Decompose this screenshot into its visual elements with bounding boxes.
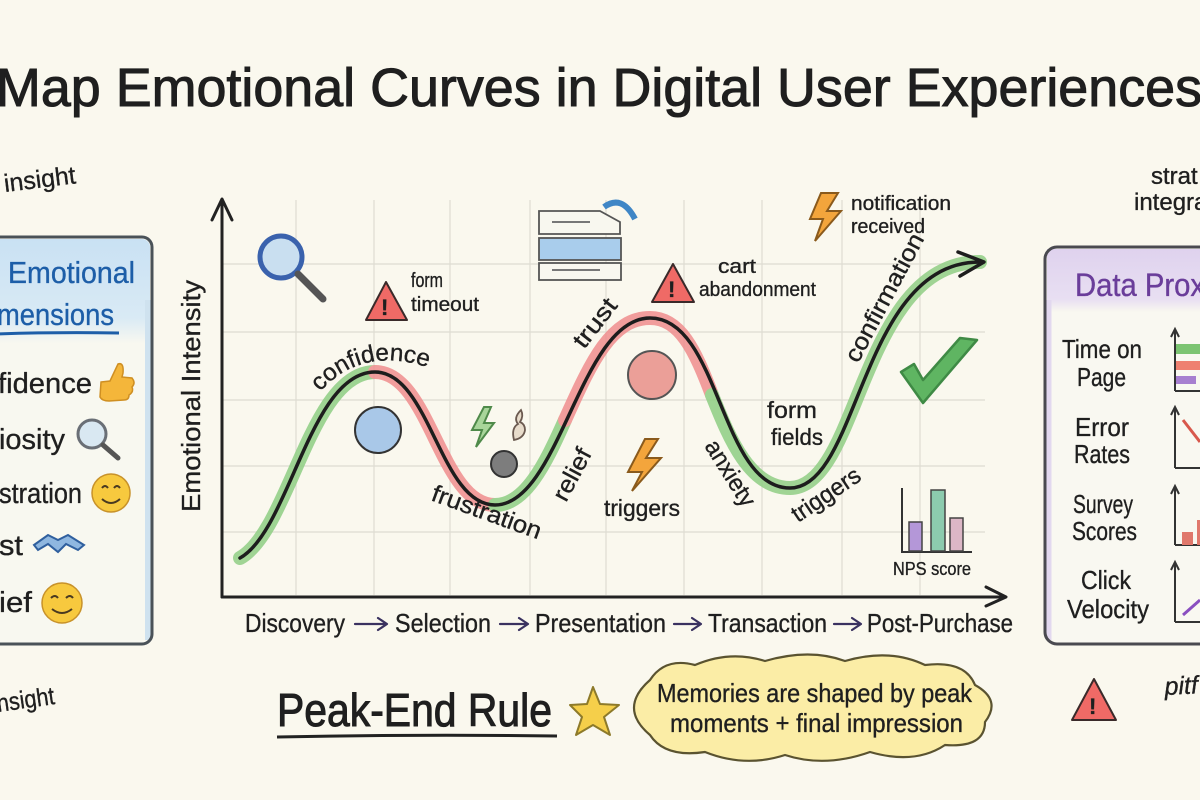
- note: pitfall: pitf: [1163, 671, 1200, 701]
- item: relief: [0, 583, 82, 623]
- x axis stages: Post-Purchase: [867, 608, 1013, 638]
- icon: check mark: [901, 338, 977, 403]
- chart: NPS score bars: [893, 488, 972, 579]
- item: curiosity: iosity: [0, 424, 65, 456]
- label: form fields: [767, 397, 823, 450]
- callout: notification received: [810, 193, 951, 241]
- x axis stages: [245, 608, 1013, 638]
- icon: warning triangle: [1072, 679, 1116, 720]
- curve line: [240, 262, 980, 558]
- curve color bands: [240, 262, 980, 558]
- proxy: error rates: Rates: [1074, 439, 1130, 469]
- x axis stages: Transaction: [708, 608, 827, 638]
- heading: peak-end rule: Peak-End Rule: [277, 684, 552, 736]
- callout: cart abandonment: !: [668, 277, 675, 302]
- curve labels: [265, 202, 968, 545]
- chart: NPS score bars: NPS score: [893, 559, 971, 579]
- curve labels: frustration: [428, 480, 545, 545]
- proxy: click velocity: Click: [1081, 565, 1132, 595]
- title: Map Emotional Curves in Digital User Experiences: [0, 58, 1200, 118]
- callout: triggers bolt: [604, 439, 680, 521]
- icon: magnifier: [260, 236, 323, 299]
- panel heading: mensions: [0, 297, 114, 332]
- x axis stages: Presentation: [535, 608, 666, 638]
- callout: cart abandonment: abandonment: [699, 279, 816, 301]
- curve labels: confidence: [314, 344, 429, 390]
- proxy: error rates: [1074, 407, 1200, 469]
- proxy: error rates: Error: [1075, 412, 1129, 442]
- curve labels: triggers: [786, 462, 866, 528]
- curve labels: confirmation: [839, 229, 930, 367]
- icon: bolt and smoke: [472, 407, 525, 447]
- icon: red circle: [628, 351, 676, 399]
- callout: memories cloud: Memories are shaped by peak: [657, 678, 973, 708]
- item: curiosity: [0, 420, 118, 458]
- icon: blue circle: [355, 407, 401, 453]
- y axis label: Emotional Intensity: [176, 280, 206, 512]
- icon: warning triangle: !: [1089, 694, 1096, 719]
- callout: form timeout: [366, 270, 479, 320]
- x axis stages: Discovery: [245, 608, 345, 638]
- callout: notification received: notification: [851, 193, 951, 215]
- item: confidence: [0, 364, 134, 401]
- axes: [212, 199, 1006, 606]
- label: form fields: form: [767, 397, 817, 423]
- callout: form timeout: timeout: [411, 294, 479, 316]
- callout: notification received: received: [851, 216, 925, 238]
- icon: star: [570, 687, 619, 735]
- curve labels: trust: [567, 293, 623, 354]
- callout: cart abandonment: [652, 256, 816, 302]
- icon: grey circle: [491, 451, 517, 477]
- curve labels: relief: [547, 443, 598, 506]
- callout: cart abandonment: cart: [718, 256, 757, 278]
- curve arrowhead: [958, 252, 984, 276]
- item: confidence: fidence: [0, 368, 92, 400]
- callout: form timeout: !: [381, 295, 388, 320]
- item: trust: [0, 530, 84, 562]
- curve labels: anxiety: [699, 435, 761, 512]
- proxy: time on page: Time on: [1062, 334, 1142, 364]
- item: hesitation: stration: [0, 478, 82, 510]
- panel: emotional dimensions: [0, 237, 152, 644]
- proxy: time on page: Page: [1077, 362, 1126, 392]
- x axis stages: Selection: [395, 608, 491, 638]
- callout: form timeout: form: [411, 270, 443, 292]
- panel heading: [0, 255, 135, 334]
- item: hesitation: [0, 474, 130, 512]
- callout: memories cloud: [634, 654, 992, 761]
- proxy: click velocity: [1067, 562, 1200, 624]
- proxy: click velocity: Velocity: [1067, 594, 1149, 624]
- proxy: survey scores: Survey: [1073, 489, 1133, 519]
- grid: [222, 200, 985, 595]
- panel: data proxies: [1045, 247, 1200, 644]
- proxy: time on page: [1062, 329, 1200, 392]
- note: strategic integration: [1134, 163, 1200, 216]
- chart: emotional curve: [176, 192, 1013, 638]
- callout: triggers bolt: triggers: [604, 495, 680, 521]
- panel heading: Emotional: [8, 255, 135, 290]
- proxy: survey scores: Scores: [1072, 516, 1137, 546]
- note: insight top: insight: [2, 161, 77, 198]
- callout: memories cloud: moments + final impression: [670, 708, 963, 738]
- note: strategic integration: strat: [1151, 163, 1198, 190]
- icon: document stack: [539, 203, 635, 280]
- label: form fields: fields: [771, 424, 823, 450]
- proxy: survey scores: [1072, 486, 1200, 546]
